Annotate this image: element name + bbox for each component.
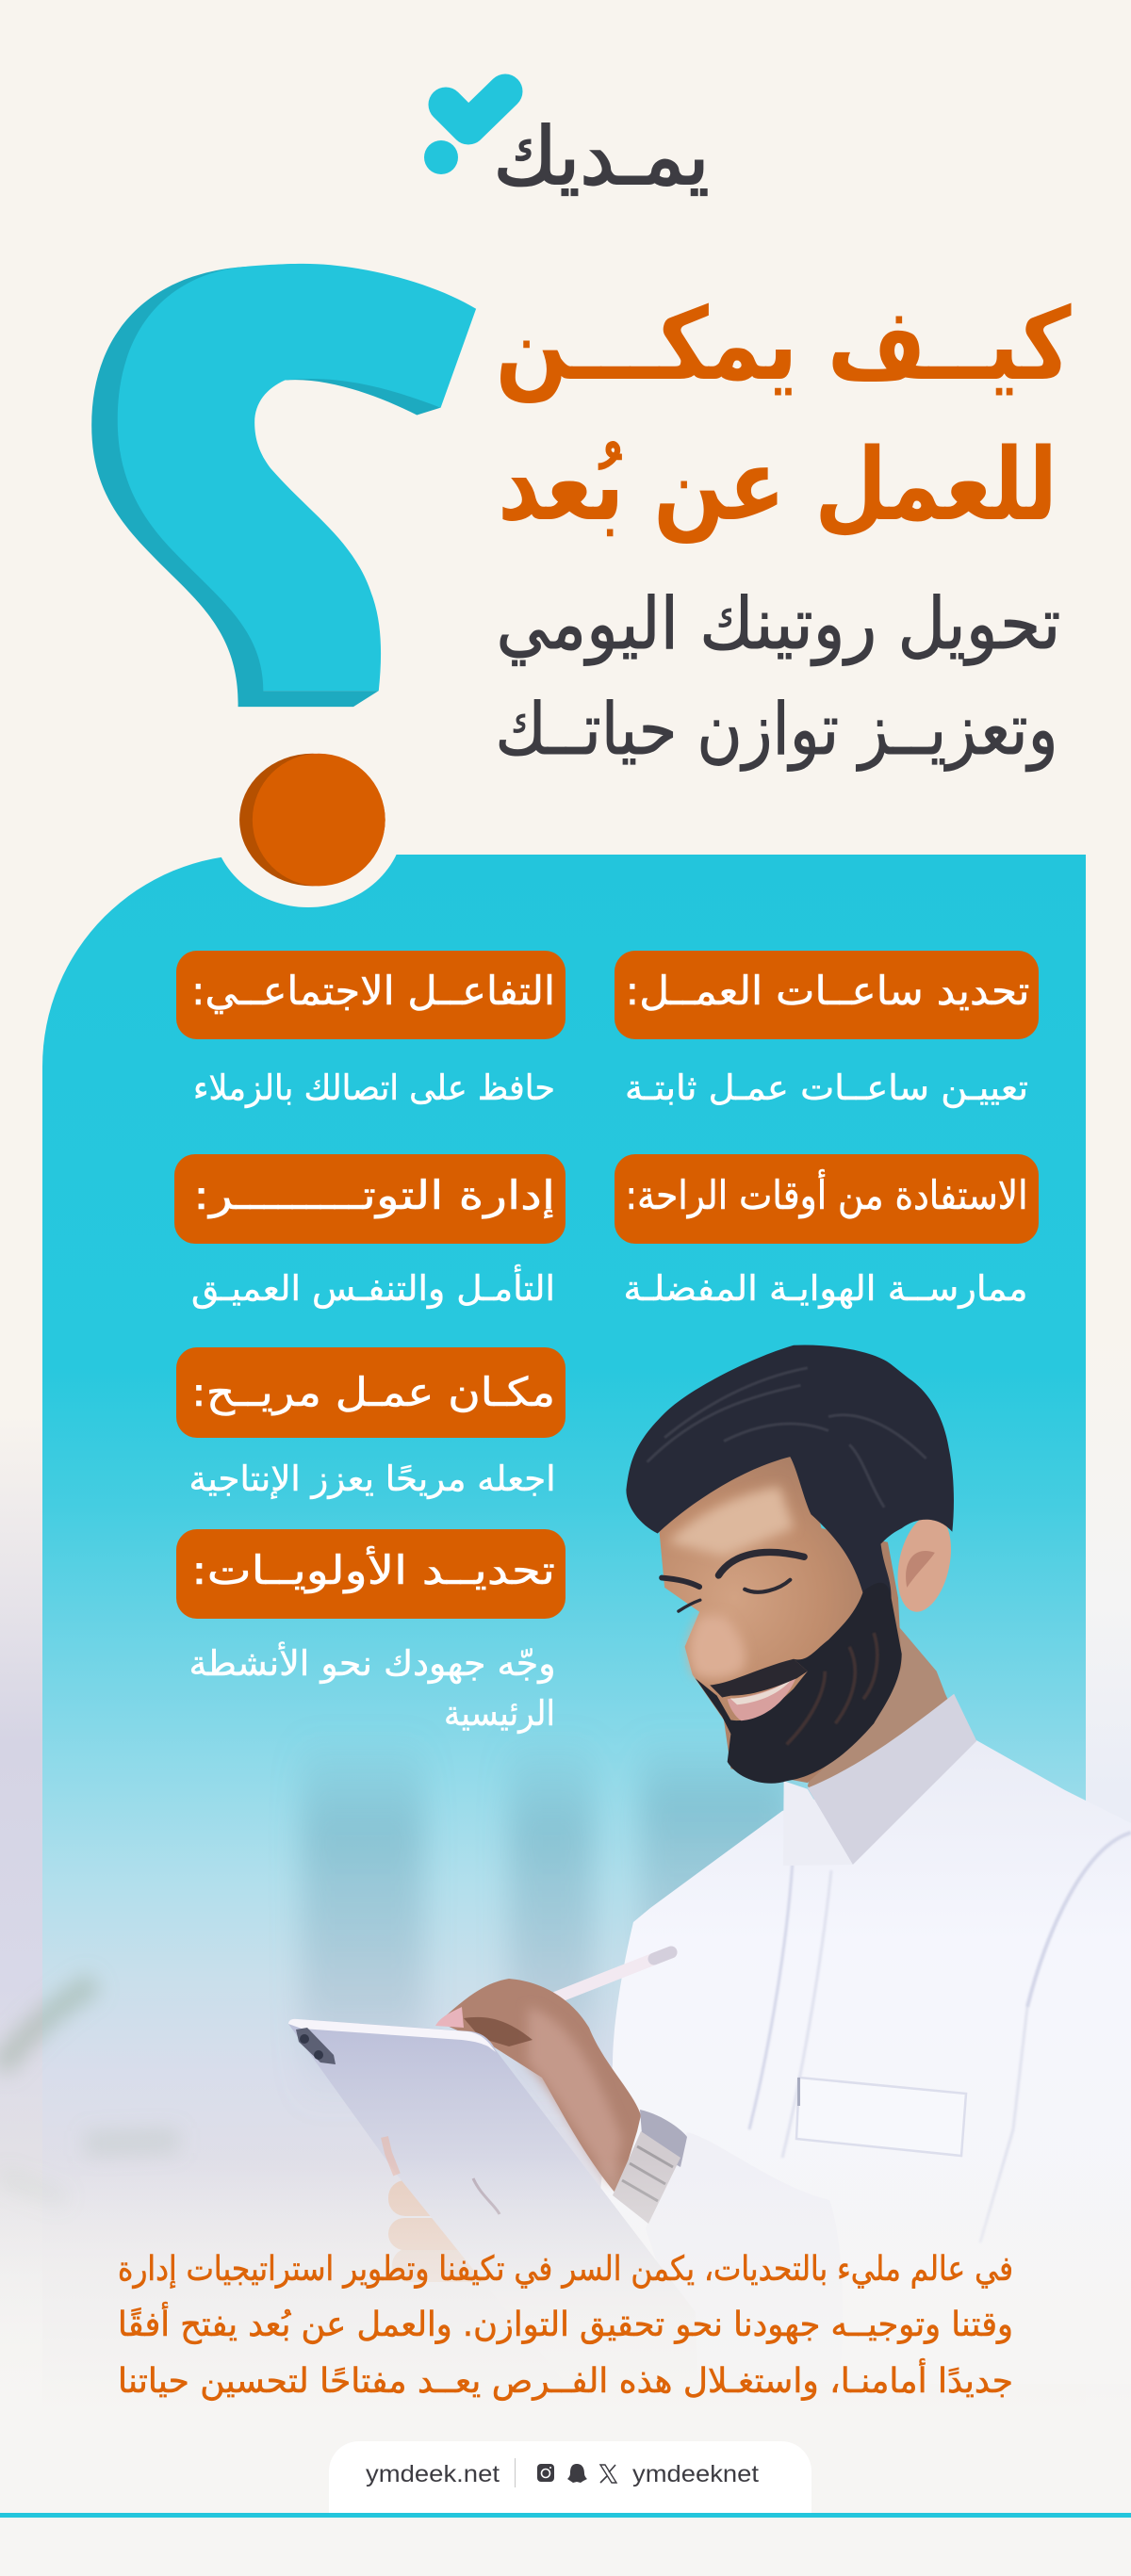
card: stress management [174, 1154, 566, 1309]
card: priorities: وجّه جهودك نحو الأنشطة [188, 1641, 556, 1684]
pen [556, 1952, 671, 1997]
icon: x [600, 2465, 616, 2483]
eyebrows and eyes [662, 1552, 804, 1611]
logo wordmark: يمـديك [494, 110, 709, 203]
card: comfortable workspace: اجعله مريحًا يعزز الإنتاجية [188, 1459, 556, 1499]
subtitle [496, 581, 1061, 772]
neck [808, 1563, 954, 1803]
logo [424, 91, 709, 203]
panel: teal content background [42, 732, 1086, 2421]
card: priorities [176, 1529, 566, 1734]
card: comfortable workspace [176, 1347, 566, 1499]
card: stress management: إدارة التوتـــــــــر: [193, 1172, 555, 1219]
subtitle: تحويل روتينك اليومي [496, 581, 1061, 666]
paragraph: وقتنا وتوجيــه جهودنا نحو تحقيق التوازن. والعمل عن بُعد يفتح أفقًا [118, 2302, 1013, 2344]
beard [696, 1583, 902, 1784]
paragraph: جديدًا أمامنـا، واستغـلال هذه الفــرص يعــد مفتاحًا لتحسين حياتنا [118, 2358, 1013, 2401]
cuff [646, 2132, 843, 2384]
paragraph [118, 2250, 1013, 2401]
card: rest breaks [615, 1154, 1039, 1309]
watch [613, 2110, 687, 2224]
ear [890, 1509, 959, 1617]
card: priorities: الرئيسية [444, 1693, 555, 1734]
moustache [710, 1659, 808, 1697]
paragraph: في عالم مليء بالتحديات، يكمن السر في تكيفنا وتطوير استراتيجيات إدارة [118, 2250, 1013, 2289]
collar [783, 1694, 976, 1866]
icon: instagram [537, 2464, 554, 2482]
footer contact bar [329, 2441, 811, 2513]
lower hand fingers [388, 2180, 533, 2282]
card: working hours: تعييـن ساعــات عمـل ثابتـة [625, 1068, 1028, 1108]
card: working hours: تحديد ساعــات العمــل: [626, 968, 1029, 1014]
title [496, 286, 1072, 544]
footer contact bar: ymdeeknet [632, 2461, 759, 2487]
footer line [0, 2513, 1131, 2518]
background: blurred curtains and plant [0, 1734, 792, 2200]
card: stress management: التأمـل والتنفـس العميـق [191, 1264, 555, 1309]
icon: question mark [91, 264, 476, 886]
card: comfortable workspace: مكـان عمـل مريــح: [191, 1369, 555, 1416]
card: working hours [615, 951, 1039, 1108]
card: social interaction: حافظ على اتصالك بالزملاء [193, 1068, 555, 1108]
upper hand [438, 1979, 641, 2195]
card: social interaction: التفاعــل الاجتماعــي: [191, 968, 555, 1015]
tablet [288, 2019, 697, 2384]
photo: man with tablet [288, 1345, 1131, 2384]
mouth [728, 1674, 797, 1720]
subtitle: وتعزيــز توازن حياتــك [496, 687, 1057, 772]
pocket [796, 2078, 966, 2156]
thobe [594, 1740, 1131, 2384]
card: rest breaks: الاستفادة من أوقات الراحة: [626, 1169, 1027, 1218]
head and face [626, 1345, 976, 1866]
icon: logo check mark [424, 91, 505, 174]
card: social interaction [176, 951, 566, 1108]
card: rest breaks: ممارســة الهوايـة المفضلـة [624, 1268, 1027, 1309]
hair [626, 1345, 954, 1598]
footer contact bar: ymdeek.net [366, 2461, 500, 2487]
icon: snapchat [567, 2464, 587, 2483]
card: priorities: تحديــد الأولويــات: [191, 1545, 555, 1593]
bottom fade overlay [0, 2158, 1131, 2421]
face skin [660, 1424, 902, 1783]
